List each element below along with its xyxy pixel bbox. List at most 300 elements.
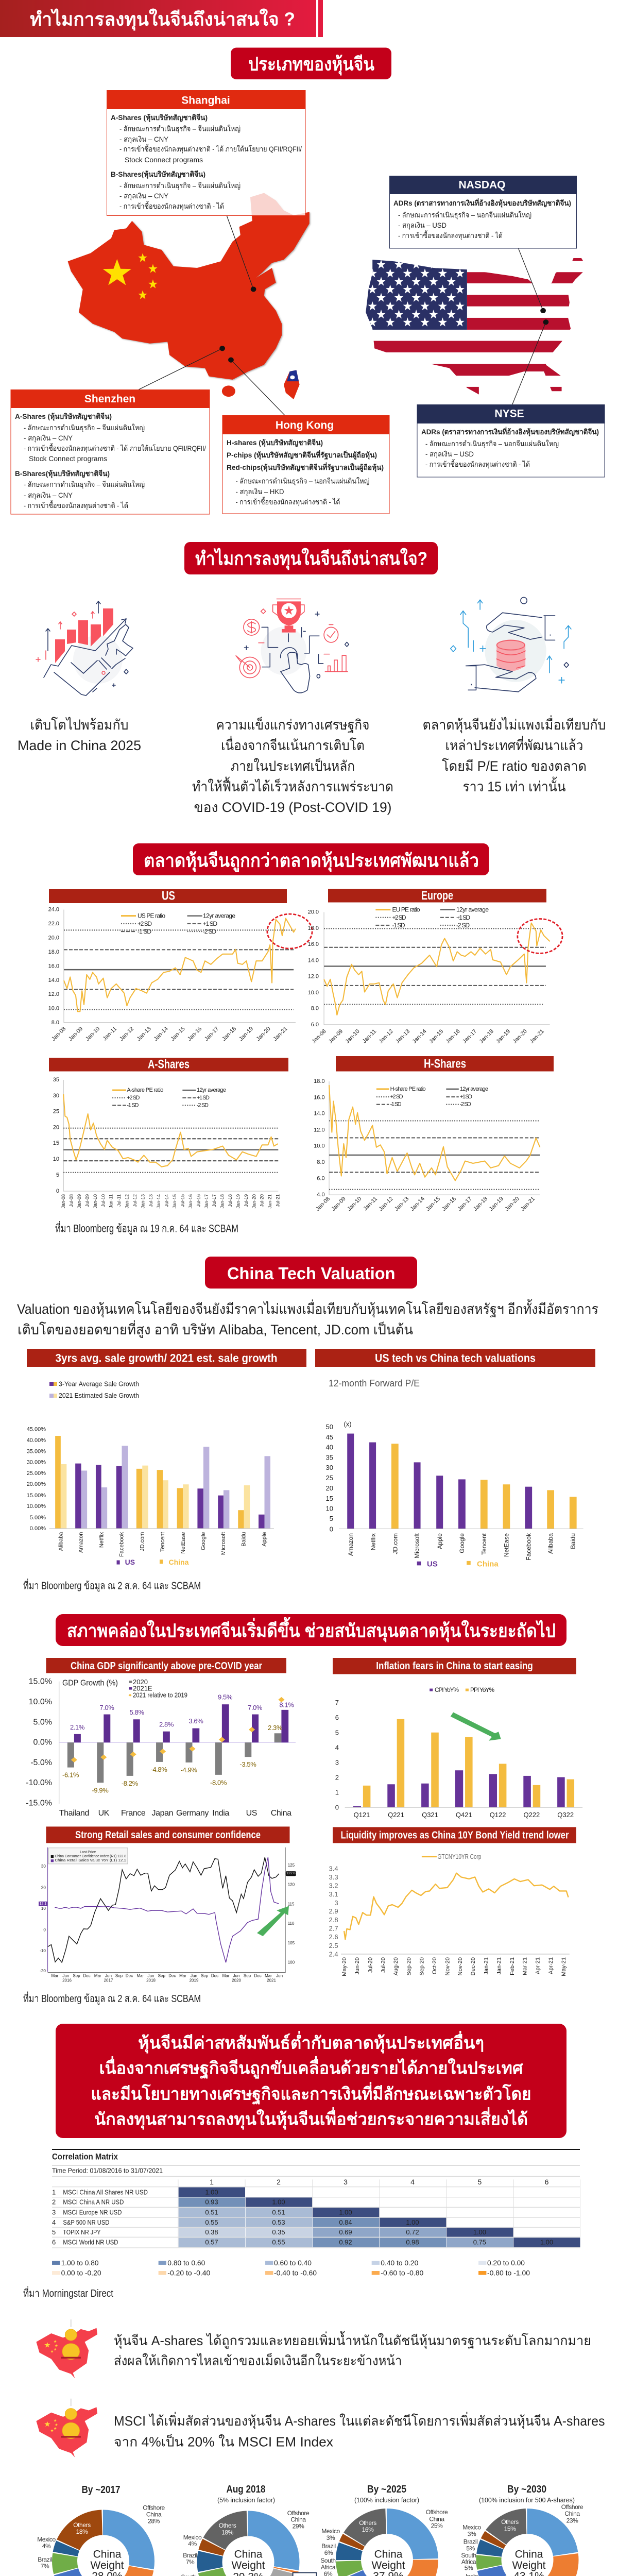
heading: types of Chinese stocks [231, 47, 391, 79]
chart: China 10Y bond yield: 2.4 [329, 1950, 338, 1958]
chart: A-Shares PE ratio: Jul-18 [228, 1194, 233, 1207]
panel: Shenzhen: B-Shares(หุ้นบริษัทสัญชาติจีน) [15, 469, 110, 478]
chart: donut Aug 2018: (5% inclusion factor) [217, 2496, 275, 2504]
chart: A-Shares PE ratio: Jul-17 [212, 1194, 217, 1207]
chart: forward PE: US [427, 1560, 438, 1568]
text: A-shares included in indices [114, 2331, 591, 2368]
panel: NASDAQ [389, 176, 577, 248]
chart: Europe PE ratio: Jan-20 [512, 1028, 528, 1045]
chart: retail sales and consumer confidence: Strong Retail sales and consumer confidence [75, 1829, 261, 1841]
table: correlation matrix: 0.80 to 0.60 [167, 2259, 205, 2267]
chart: US PE ratio: Jan-13 [136, 1026, 152, 1042]
chart: US PE ratio: 22.0 [48, 921, 59, 927]
source note: ที่มา Morningstar Direct [23, 2286, 113, 2299]
chart: retail sales and consumer confidence: Jun [233, 1973, 239, 1978]
chart: China 10Y bond yield: Jun-20 [354, 1957, 360, 1975]
chart: donut by 2017: 18% [76, 2528, 88, 2535]
heading: types of Chinese stocks: ประเภทของหุ้นจีน [248, 54, 374, 76]
panel: Shenzhen: - ลักษณะการดำเนินธุรกิจ – จีนแผ่นดินใหญ่ [24, 480, 145, 489]
chart: China 10Y bond yield: Jan-21 [496, 1957, 503, 1975]
chart: retail sales and consumer confidence: Dec [83, 1973, 91, 1978]
chart: retail sales and consumer confidence: Mar [52, 1973, 59, 1978]
chart: donut by 2017: Mexico [37, 2536, 56, 2543]
chart: US PE ratio: -1 SD [138, 928, 151, 935]
chart: Europe PE ratio: -1 SD [392, 922, 405, 929]
chart: Europe PE ratio [308, 889, 562, 1045]
chart: US PE ratio: 24.0 [48, 907, 59, 913]
chart: retail sales and consumer confidence [39, 1826, 296, 1982]
chart: forward PE: 30 [326, 1464, 333, 1471]
chart: sale growth: Facebook [118, 1532, 125, 1557]
chart: forward PE: 35 [326, 1454, 333, 1461]
table: correlation matrix: 1.00 [205, 2189, 218, 2196]
chart: retail sales and consumer confidence: 30 [41, 1864, 46, 1869]
chart: China GDP: 2021 relative to 2019 [133, 1691, 187, 1699]
chart: Europe PE ratio: Jan-10 [344, 1028, 361, 1045]
chart: Europe PE ratio: EU PE ratio [392, 906, 420, 913]
chart: H-Shares PE ratio: 12.0 [314, 1127, 325, 1133]
chart: China 10Y bond yield: 2.6 [329, 1933, 338, 1941]
chart: Europe PE ratio: 16.0 [308, 941, 319, 947]
chart: US PE ratio: US [162, 889, 175, 903]
panel: NYSE: - ลักษณะการดำเนินธุรกิจ – นอกจีนแผ่นดินใหญ่ [425, 439, 559, 448]
chart: H-Shares PE ratio: +1 SD [460, 1094, 472, 1100]
chart: H-Shares PE ratio: Jan-12 [377, 1196, 394, 1212]
icon: hands around coin stack [451, 597, 571, 692]
chart: retail sales and consumer confidence: 2020 [232, 1978, 241, 1982]
table: correlation matrix: 0.69 [339, 2228, 352, 2236]
chart: China GDP: Japan [151, 1809, 173, 1818]
table: correlation matrix: TOPIX NR JPY [63, 2228, 101, 2236]
chart: China GDP [26, 1658, 296, 1818]
connector lines and location dots [139, 215, 548, 415]
chart: sale growth: Baidu [241, 1532, 247, 1547]
chart: retail sales and consumer confidence: 122.8 [286, 1872, 296, 1875]
text: A-shares included in indices: หุ้นจีน A-shares ได้ถูกรวมและทยอยเพิ่มน้ำหนักในดัชนีหุ้นมาตรฐานระดับโลกมากมาย [114, 2331, 591, 2349]
chart: US PE ratio: +1 SD [203, 920, 217, 927]
chart: A-Shares PE ratio: Jan-08 [61, 1194, 66, 1209]
chart: China GDP: France [121, 1809, 146, 1818]
chart: China GDP: China [271, 1809, 291, 1818]
text: A-shares included in indices: ส่งผลให้เกิดการไหลเข้าของเม็ดเงินอีกในระยะข้างหน้า [114, 2352, 402, 2368]
icon: rising chart with fist [36, 601, 133, 696]
chart: inflation: Q222 [523, 1811, 540, 1819]
panel: Shanghai: - การเข้าซื้อของนักลงทุนต่างชาติ - ได้ [119, 201, 224, 211]
text: economic strength: ของ COVID-19 (Post-COVID 19) [194, 800, 391, 815]
chart: US PE ratio: Jan-09 [67, 1026, 84, 1042]
chart: A-Shares PE ratio: Jan-13 [140, 1194, 145, 1209]
chart: China GDP: US [246, 1809, 257, 1818]
table: correlation matrix: 3 [344, 2178, 348, 2186]
text: MSCI weighting: MSCI ได้เพิ่มสัดส่วนของหุ้นจีน A-shares ในแต่ละดัชนีโดยการเพิ่มสัดส่วนหุ้นจีน A-shares [114, 2412, 605, 2429]
chart: donut by 2025: Weight [372, 2560, 405, 2571]
chart: retail sales and consumer confidence: 125 [288, 1863, 295, 1868]
table: correlation matrix: 0.98 [406, 2238, 419, 2246]
chart: China GDP: China GDP significantly above pre-COVID year [71, 1660, 262, 1672]
chart: A-Shares PE ratio: Jan-12 [125, 1194, 130, 1209]
chart: forward PE: (x) [344, 1420, 352, 1428]
chart: sale growth: 45.00% [27, 1426, 46, 1432]
chart: forward PE: JD.com [392, 1533, 399, 1554]
chart: retail sales and consumer confidence: Sep [244, 1973, 251, 1978]
chart: A-Shares PE ratio: Jan-19 [235, 1194, 241, 1209]
table: correlation matrix: S&P 500 NR USD [63, 2218, 109, 2226]
chart: H-Shares PE ratio: Jan-19 [488, 1196, 505, 1212]
table: correlation matrix: 1 [52, 2189, 56, 2196]
chart: retail sales and consumer confidence: -10 [40, 1948, 46, 1953]
chart: donut by 2030: 23% [566, 2517, 578, 2524]
chart: donut by 2017: By ~2017 [81, 2484, 121, 2496]
chart: China 10Y bond yield: Liquidity improves as China 10Y Bond Yield trend lower [341, 1830, 569, 1841]
table: correlation matrix: 2 [277, 2178, 281, 2186]
panel: Shanghai: Shanghai [181, 95, 230, 106]
table: correlation matrix: 3 [52, 2208, 56, 2216]
chart: forward PE: Apple [436, 1533, 443, 1549]
panel: NYSE: NYSE [494, 408, 524, 419]
chart: US PE ratio: Jan-16 [186, 1026, 203, 1042]
text: valuation not expensive: ราว 15 เท่า เท่านั้น [462, 776, 565, 794]
chart: retail sales and consumer confidence: Sep [115, 1973, 123, 1978]
table: correlation matrix: 4 [410, 2178, 415, 2186]
heading: liquidity improving: สภาพคล่องในประเทศจีนเริ่มดีขึ้น ช่วยสนับสนุนตลาดหุ้นในระยะถัดไป [67, 1617, 556, 1642]
chart: H-Shares PE ratio: 14.0 [314, 1111, 325, 1117]
table: correlation matrix: 1.00 [473, 2228, 486, 2236]
chart: donut Aug 2018: Mexico [183, 2534, 202, 2541]
chart: donut by 2025: Brazil [321, 2543, 336, 2550]
chart: forward PE [315, 1349, 595, 1568]
chart: sale growth: 30.00% [27, 1459, 46, 1465]
chart: A-Shares PE ratio: Jul-16 [196, 1194, 201, 1207]
table: correlation matrix: 0.55 [205, 2218, 218, 2226]
chart: forward PE: US tech vs China tech valuations [375, 1352, 536, 1364]
chart: donut by 2030: 5% [466, 2545, 475, 2552]
chart: Europe PE ratio: Jan-21 [529, 1028, 545, 1045]
chart: inflation: Inflation fears in China to start easing [376, 1660, 533, 1672]
chart: US PE ratio: Jan-08 [50, 1026, 67, 1042]
chart: China 10Y bond yield: Jan-21 [483, 1957, 489, 1975]
chart: donut by 2025: Offshore [426, 2509, 448, 2516]
chart: China 10Y bond yield: Sep-20 [406, 1957, 412, 1975]
chart: retail sales and consumer confidence: 100 [288, 1960, 295, 1965]
chart: retail sales and consumer confidence: 105 [288, 1941, 295, 1945]
chart: donut by 2025: Mexico [321, 2528, 340, 2535]
header banner: ทำไมการลงทุนในจีนถึงน่าสนใจ ? [30, 8, 295, 31]
chart: donut by 2030: China [515, 2548, 543, 2561]
chart: US PE ratio [48, 889, 312, 1042]
chart: retail sales and consumer confidence: 120 [288, 1883, 295, 1887]
chart: sale growth: 5.00% [30, 1515, 46, 1521]
chart: donut by 2030 [461, 2484, 591, 2576]
chart: Europe PE ratio: Jan-16 [444, 1028, 461, 1045]
chart: A-Shares PE ratio: Jan-18 [220, 1194, 225, 1209]
chart: retail sales and consumer confidence: 0 [43, 1928, 46, 1932]
chart: donut by 2017 [37, 2484, 165, 2576]
heading: China Tech Valuation: China Tech Valuation [227, 1264, 396, 1283]
chart: sale growth: Tencent [160, 1532, 166, 1552]
chart: A-Shares PE ratio: Jul-09 [84, 1194, 90, 1207]
chart: US PE ratio: Jan-17 [203, 1026, 220, 1042]
panel: Hong Kong: - ลักษณะการดำเนินธุรกิจ – นอกจีนแผ่นดินใหญ่ [236, 477, 370, 485]
chart: retail sales and consumer confidence: Mar [222, 1973, 230, 1978]
chart: China GDP: 10.0% [29, 1698, 52, 1706]
text: MSCI weighting: จาก 4%เป็น 20% ใน MSCI EM Index [114, 2434, 333, 2449]
panel: Hong Kong: Hong Kong [276, 419, 334, 431]
chart: China GDP: -4.8% [150, 1766, 167, 1773]
chart: China 10Y bond yield: Nov-20 [444, 1957, 451, 1975]
chart: China 10Y bond yield: Dec-20 [470, 1957, 476, 1975]
panel: Shenzhen: Stock Connect programs [29, 454, 107, 463]
chart: donut Aug 2018 [181, 2484, 317, 2576]
icon: China coin map 1 [36, 2319, 97, 2378]
chart: US PE ratio: US PE ratio [138, 912, 165, 920]
chart: donut by 2025: 25% [431, 2522, 443, 2530]
chart: retail sales and consumer confidence: Mar [137, 1973, 144, 1978]
heading: China Tech Valuation [205, 1257, 417, 1289]
chart: donut by 2030: Others [501, 2518, 519, 2526]
chart: Europe PE ratio: Jan-14 [411, 1028, 428, 1045]
chart: retail sales and consumer confidence: 20 [41, 1885, 46, 1890]
chart: inflation: Q121 [354, 1811, 370, 1819]
chart: A-Shares PE ratio: Jul-13 [148, 1194, 153, 1207]
table: correlation matrix: 1.00 to 0.80 [61, 2259, 99, 2267]
chart: China GDP: Germany [176, 1809, 209, 1818]
chart: donut Aug 2018: Aug 2018 [227, 2484, 266, 2495]
chart: A-Shares PE ratio: Jul-20 [260, 1194, 265, 1207]
panel: Shenzhen: - สกุลเงิน – CNY [24, 434, 73, 443]
header banner [0, 0, 323, 37]
chart: donut by 2017: Weight [91, 2560, 124, 2571]
chart: donut Aug 2018: Others [219, 2522, 236, 2529]
chart: China 10Y bond yield: 3.3 [329, 1873, 338, 1881]
chart: A-Shares PE ratio: Jul-21 [275, 1194, 280, 1207]
callout: low correlation: หุ้นจีนมีค่าสหสัมพันธ์ต่ำกับตลาดหุ้นประเทศอื่นๆ [138, 2031, 484, 2054]
chart: donut by 2017: 7% [41, 2563, 49, 2570]
chart: sale growth: Amazon [78, 1532, 84, 1553]
chart: China 10Y bond yield: May-20 [341, 1957, 348, 1976]
chart: US PE ratio: Jan-19 [238, 1026, 254, 1042]
chart: forward PE: 0 [330, 1525, 333, 1533]
chart: Europe PE ratio: Jan-17 [461, 1028, 478, 1045]
chart: H-Shares PE ratio: +2 SD [390, 1094, 403, 1100]
chart: China 10Y bond yield: 3.1 [329, 1890, 338, 1898]
heading: cheaper than developed markets [133, 843, 489, 875]
text: valuation not expensive: ตลาดหุ้นจีนยังไม่แพงเมื่อเทียบกับ [422, 715, 606, 734]
chart: A-Shares PE ratio: Jan-20 [251, 1194, 256, 1209]
chart: H-Shares PE ratio: Jan-13 [393, 1196, 410, 1212]
chart: sale growth: JD.com [139, 1532, 145, 1551]
chart: donut Aug 2018: Weight [232, 2560, 265, 2571]
panel: Hong Kong: - การเข้าซื้อของนักลงทุนต่างชาติ - ได้ [236, 497, 340, 506]
heading: liquidity improving [56, 1614, 566, 1646]
source note: ที่มา Bloomberg ข้อมูล ณ 2 ส.ค. 64 และ SCBAM [23, 1991, 201, 2005]
chart: China 10Y bond yield: Apr-21 [535, 1957, 541, 1974]
chart: inflation: PPI YoY% [470, 1686, 494, 1693]
chart: H-Shares PE ratio: 18.0 [314, 1078, 325, 1084]
chart: Europe PE ratio: Jan-19 [495, 1028, 511, 1045]
table: correlation matrix: 0.60 to 0.40 [274, 2259, 312, 2267]
chart: inflation: 1 [335, 1789, 339, 1796]
table: correlation matrix: 6 [52, 2238, 56, 2246]
chart: H-Shares PE ratio: -1 SD [390, 1101, 402, 1108]
chart: US PE ratio: +2 SD [138, 920, 152, 927]
table: correlation matrix: -0.60 to -0.80 [381, 2269, 424, 2277]
chart: retail sales and consumer confidence: Mar [265, 1973, 272, 1978]
chart: A-Shares PE ratio: Jan-09 [77, 1194, 82, 1209]
chart: Europe PE ratio: Jan-15 [428, 1028, 444, 1045]
chart: sale growth: US [125, 1558, 135, 1566]
chart: retail sales and consumer confidence: Jun [148, 1973, 154, 1978]
chart: donut by 2025: (100% inclusion factor) [354, 2496, 419, 2504]
panel: NASDAQ: - การเข้าซื้อของนักลงทุนต่างชาติ - ได้ [398, 230, 503, 240]
chart: China GDP: 7.0% [99, 1704, 114, 1711]
chart: Europe PE ratio: Jan-18 [478, 1028, 495, 1045]
chart: China 10Y bond yield: 2.8 [329, 1916, 338, 1924]
chart: China GDP: 0.0% [33, 1738, 52, 1747]
chart: China GDP: Thailand [59, 1809, 89, 1818]
chart: donut by 2025: China [429, 2515, 444, 2522]
chart: China 10Y bond yield: 2.7 [329, 1925, 338, 1932]
chart: retail sales and consumer confidence: Dec [254, 1973, 262, 1978]
chart: China GDP: 2.8% [159, 1721, 174, 1728]
chart: donut by 2017: Brazil [38, 2556, 52, 2563]
chart: Europe PE ratio: 12yr average [456, 906, 489, 913]
chart: Europe PE ratio: Jan-11 [362, 1028, 377, 1044]
text: Made in China 2025: Made in China 2025 [18, 738, 141, 753]
chart: retail sales and consumer confidence: Sep [158, 1973, 165, 1978]
panel: NYSE: - สกุลเงิน – USD [425, 450, 474, 459]
table: correlation matrix: 0.20 to 0.00 [487, 2259, 525, 2267]
chart: China GDP: 2.3% [268, 1724, 283, 1732]
chart: sale growth: 0.00% [30, 1526, 46, 1532]
chart: China GDP: 7.0% [248, 1704, 263, 1711]
panel: Shenzhen: - การเข้าซื้อของนักลงทุนต่างชาติ - ได้ [24, 500, 128, 510]
heading: why invest in China [184, 542, 438, 574]
chart: forward PE: Tencent [480, 1533, 488, 1555]
chart: donut by 2030: Brazil [464, 2538, 477, 2545]
chart: China GDP: 2021E [133, 1685, 152, 1692]
chart: donut by 2017: Others [73, 2521, 91, 2529]
chart: Europe PE ratio: 14.0 [308, 957, 319, 963]
chart: China 10Y bond yield: Jul-20 [367, 1957, 373, 1973]
chart: US PE ratio: Jan-12 [118, 1026, 135, 1042]
chart: inflation: CPI YoY% [435, 1686, 459, 1693]
table: correlation matrix: 1.00 [339, 2208, 352, 2216]
chart: US PE ratio: Jan-14 [152, 1026, 169, 1042]
panel: Shenzhen: A-Shares (หุ้นบริษัทสัญชาติจีน) [15, 412, 112, 421]
chart: US PE ratio: Jan-10 [84, 1026, 101, 1042]
chart: retail sales and consumer confidence: Mar [94, 1973, 101, 1978]
chart: China 10Y bond yield: Oct-20 [432, 1957, 438, 1974]
chart: donut Aug 2018: 4% [188, 2540, 197, 2548]
map: China with flag [68, 193, 310, 399]
chart: H-Shares PE ratio: -2 SD [460, 1101, 471, 1108]
chart: A-Shares PE ratio: +2 SD [127, 1095, 140, 1101]
chart: forward PE: Baidu [570, 1533, 577, 1549]
source note: ที่มา Bloomberg ข้อมูล ณ 19 ก.ค. 64 และ SCBAM [55, 1221, 238, 1235]
chart: A-Shares PE ratio: 10 [53, 1156, 59, 1162]
chart: Europe PE ratio: Jan-08 [311, 1028, 328, 1045]
chart: retail sales and consumer confidence: Dec [126, 1973, 133, 1978]
chart: inflation: Q321 [422, 1811, 438, 1819]
table: correlation matrix: 2 [52, 2198, 56, 2206]
chart: donut by 2025: 16% [362, 2526, 374, 2533]
chart: A-Shares PE ratio: A-share PE ratio [127, 1087, 163, 1093]
map: USA with flag [363, 257, 593, 398]
chart: forward PE: NetEase [503, 1533, 510, 1557]
chart: donut by 2030: Weight [512, 2560, 546, 2571]
chart: retail sales and consumer confidence: Dec [211, 1973, 218, 1978]
chart: A-Shares PE ratio: 25 [53, 1109, 59, 1115]
table: correlation matrix: -0.20 to -0.40 [167, 2269, 211, 2277]
chart: donut by 2025: 3% [327, 2534, 335, 2541]
chart: A-Shares PE ratio: 12yr average [197, 1087, 226, 1093]
icon: China coin map 2 [36, 2399, 97, 2458]
chart: donut by 2030: By ~2030 [507, 2484, 546, 2495]
chart: H-Shares PE ratio: Jan-11 [363, 1196, 379, 1212]
chart: China 10Y bond yield: Mar-21 [522, 1957, 528, 1975]
chart: inflation: 5 [335, 1728, 339, 1736]
chart: China 10Y bond yield: Apr-21 [548, 1957, 554, 1974]
chart: Europe PE ratio: 10.0 [308, 990, 319, 996]
chart: A-Shares PE ratio: Jul-19 [244, 1194, 249, 1207]
table: correlation matrix: 0.75 [473, 2238, 486, 2246]
chart: forward PE: 15 [326, 1495, 333, 1502]
chart: A-Shares PE ratio: Jul-12 [132, 1194, 138, 1207]
chart: China GDP: 8.1% [279, 1701, 294, 1708]
chart: forward PE: Alibaba [547, 1533, 554, 1554]
chart: donut Aug 2018: Brazil [183, 2552, 197, 2559]
chart: H-Shares PE ratio: Jan-09 [331, 1196, 347, 1212]
panel: Shanghai: - ลักษณะการดำเนินธุรกิจ – จีนแผ่นดินใหญ่ [119, 125, 241, 133]
chart: China 10Y bond yield: 2.5 [329, 1942, 338, 1950]
chart: donut by 2030: South [461, 2552, 476, 2559]
chart: A-Shares PE ratio: Jan-17 [204, 1194, 209, 1209]
chart: donut by 2017: Offshore [143, 2504, 165, 2511]
chart: Europe PE ratio: 12.0 [308, 974, 319, 980]
table: correlation matrix: 0.53 [272, 2218, 285, 2226]
chart: retail sales and consumer confidence: Jun [276, 1973, 283, 1978]
chart: A-Shares PE ratio: Jul-11 [116, 1194, 122, 1207]
chart: China GDP: UK [98, 1809, 110, 1818]
chart: sale growth: Google [200, 1532, 207, 1550]
chart: inflation: Q221 [388, 1811, 404, 1819]
chart: Europe PE ratio: Jan-09 [328, 1028, 344, 1045]
chart: US PE ratio: Jan-11 [102, 1026, 118, 1042]
chart: A-Shares PE ratio: +1 SD [197, 1095, 210, 1101]
table: correlation matrix: Time Period: 01/08/2016 to 31/07/2021 [52, 2167, 163, 2174]
chart: retail sales and consumer confidence: China Retail Sales Value YoY (L1) 12.1 [55, 1859, 126, 1862]
chart: A-Shares PE ratio: -1 SD [127, 1103, 139, 1109]
chart: inflation: 3 [335, 1759, 339, 1766]
chart: US PE ratio: 12.0 [48, 991, 59, 997]
chart: forward PE: 25 [326, 1474, 333, 1482]
chart: inflation: 7 [335, 1699, 339, 1706]
panel: Shanghai: - สกุลเงิน – CNY [119, 192, 169, 200]
panel: Shanghai [107, 90, 305, 215]
chart: sale growth: 10.00% [27, 1503, 46, 1510]
table: correlation matrix: 6 [545, 2178, 549, 2186]
chart: China 10Y bond yield: Aug-20 [393, 1957, 399, 1975]
chart: US PE ratio: 20.0 [48, 935, 59, 941]
chart: sale growth: China [169, 1558, 189, 1566]
chart: forward PE: Netflix [370, 1533, 377, 1550]
chart: Europe PE ratio: 20.0 [308, 909, 319, 915]
chart: donut Aug 2018: Offshore [287, 2510, 310, 2517]
chart: China 10Y bond yield: 3.2 [329, 1882, 338, 1890]
chart: China GDP: 9.5% [218, 1693, 233, 1701]
chart: China 10Y bond yield: Jul-20 [381, 1957, 387, 1973]
table: correlation matrix: 5 [478, 2178, 482, 2186]
